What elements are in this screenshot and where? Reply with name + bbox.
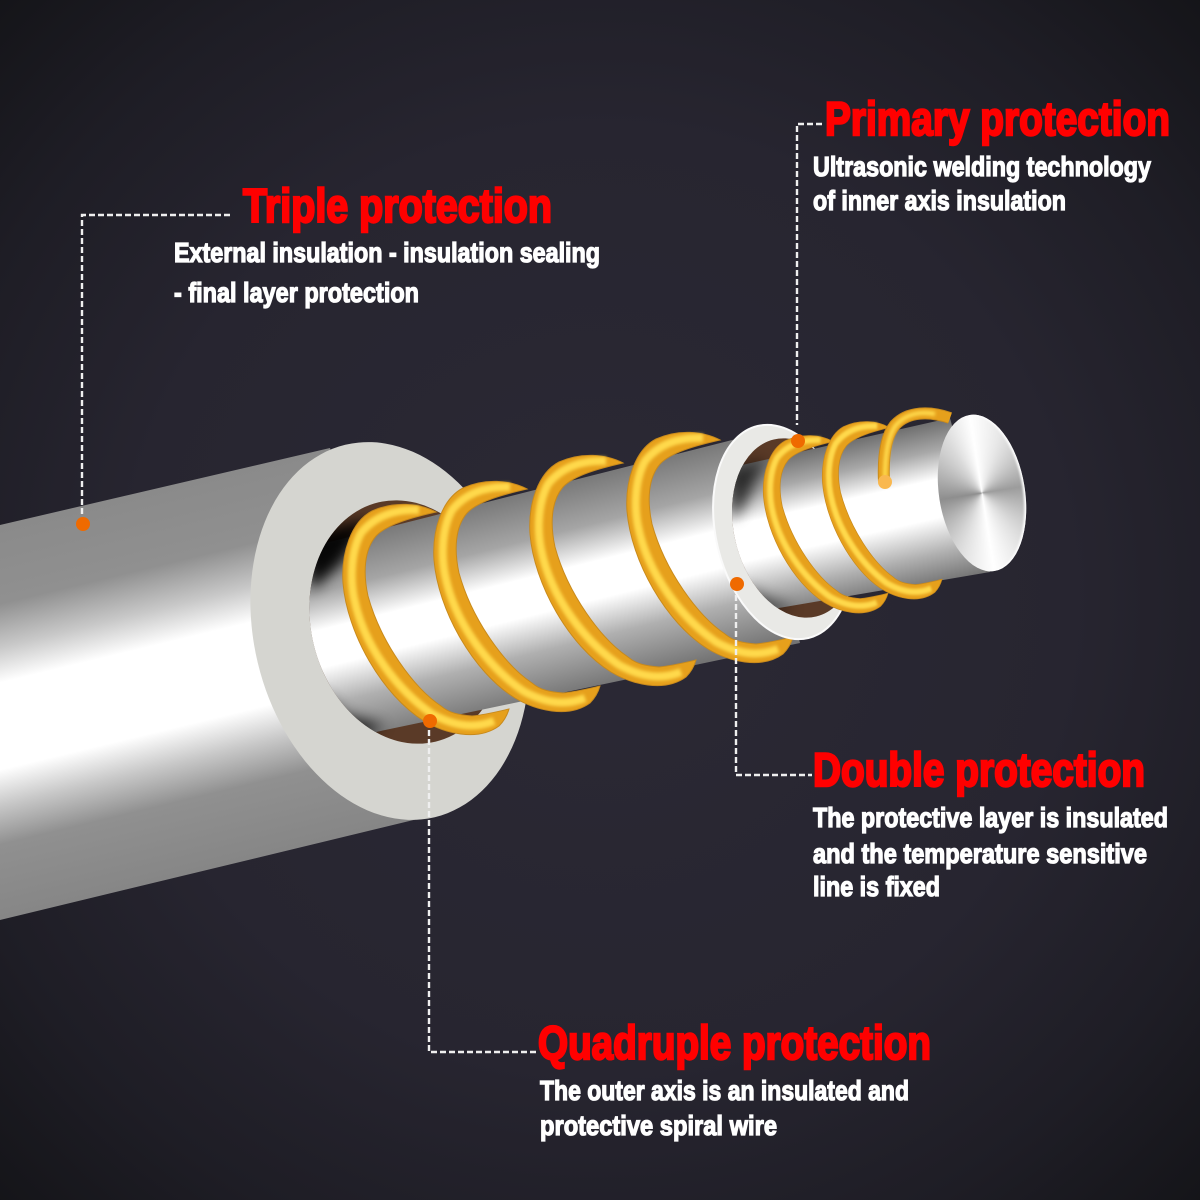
outer insulation cylinder (0, 448, 430, 920)
core cylinder (720, 418, 990, 618)
spiral wire: small coils (763, 413, 950, 613)
text: triple description: - final layer protection (174, 277, 419, 308)
core hole shadow (728, 460, 795, 615)
leader line: triple (82, 215, 230, 515)
core end cap (930, 405, 1034, 581)
callout: double protection (730, 577, 1168, 902)
outer ring hole (285, 480, 529, 764)
callout: primary protection (791, 92, 1170, 448)
text: primary description (813, 151, 1151, 216)
inner protective ring (692, 410, 874, 654)
marker: triple (76, 517, 90, 531)
leader line: double (736, 595, 812, 775)
spiral wire: large coils (343, 432, 793, 735)
outer insulation ring (213, 413, 567, 849)
text: double description: and the temperature sensitive (813, 838, 1147, 869)
text: quadruple description (540, 1075, 909, 1141)
heading: triple protection: Triple protection (243, 179, 552, 232)
inner axis cylinder (309, 440, 800, 732)
text: double description: line is fixed (813, 871, 940, 902)
leader line: quadruple (429, 730, 537, 1052)
text: primary description: of inner axis insulation (813, 185, 1066, 216)
hole shadow (310, 512, 387, 735)
text: triple description: External insulation - insulation sealing (174, 237, 600, 268)
callout: quadruple protection (423, 714, 931, 1141)
wire end (878, 475, 892, 489)
illustration: layered cable (0, 405, 1034, 920)
inner ring hole (714, 425, 876, 631)
text: quadruple description: The outer axis is an insulated and (540, 1075, 909, 1106)
marker: quadruple (423, 714, 437, 728)
text: triple description (174, 237, 600, 308)
leader line: primary (797, 124, 822, 425)
callout: triple protection (76, 179, 600, 531)
marker: primary (791, 434, 805, 448)
text: double description (813, 802, 1168, 902)
marker: double (730, 577, 744, 591)
heading: quadruple protection: Quadruple protection (538, 1016, 931, 1069)
text: quadruple description: protective spiral wire (540, 1110, 777, 1141)
